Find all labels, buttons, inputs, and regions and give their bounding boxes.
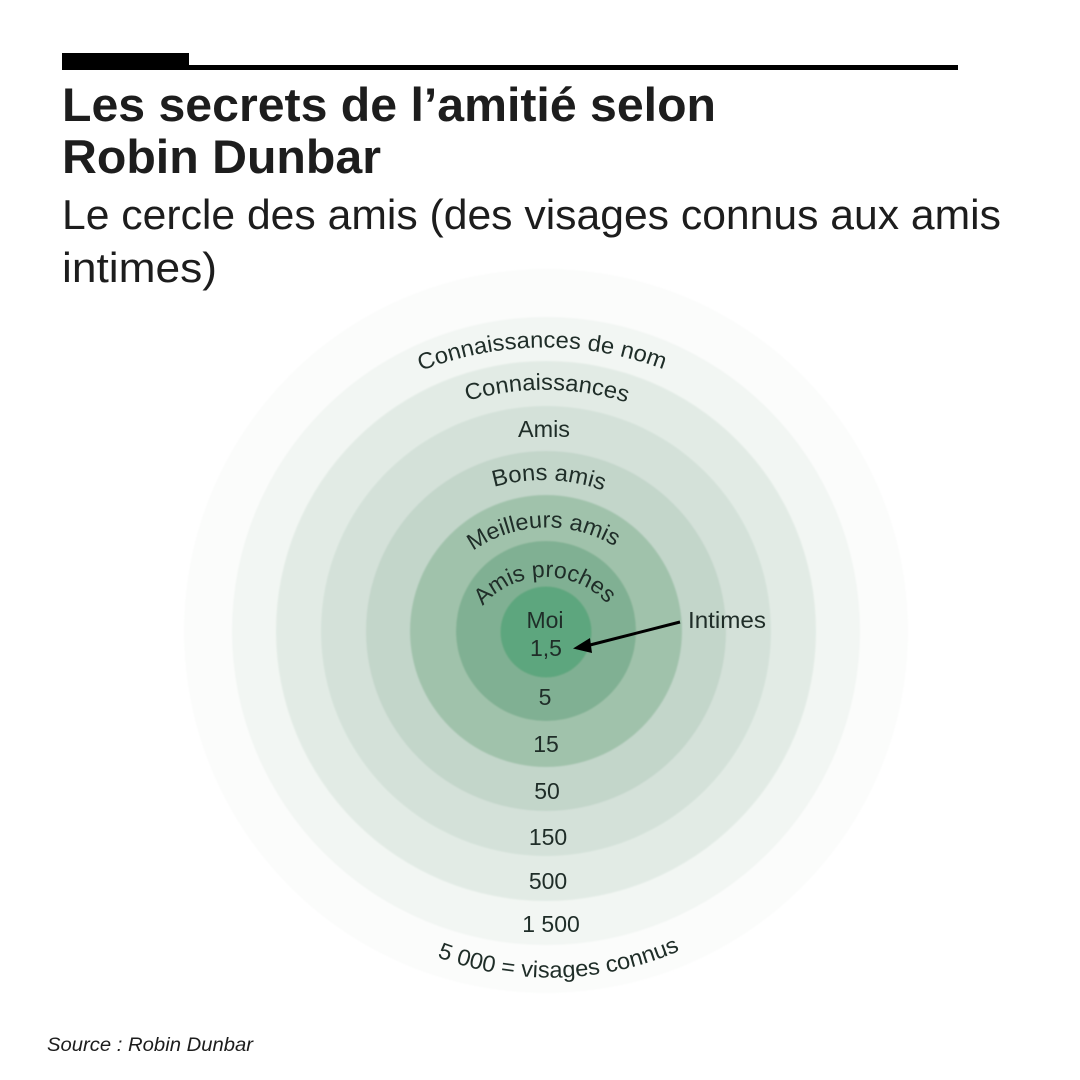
label: moi: Moi [526,607,564,633]
value: 1 500: 1 500 [522,911,580,937]
value: 1,5: 1,5 [530,635,562,661]
arrow: intimes [573,622,680,653]
source: Source : Robin Dunbar [47,1035,254,1056]
chart: concentric friendship circles [232,317,860,982]
value: 150: 150 [529,824,567,850]
label: connaissances: Connaissances [466,373,628,402]
value: 15: 15 [533,731,559,757]
circle: connaissances [276,361,816,901]
title [62,78,716,183]
circle: amis [321,406,771,856]
value: 50: 50 [534,778,560,804]
circle: connaissances de nom [232,317,860,945]
label: bons amis: Bons amis [492,468,606,490]
subtitle: Le cercle des amis (des visages connus aux amis [62,191,1001,238]
label: connaissances de nom: Connaissances de nom [418,335,666,369]
title: Les secrets de l’amitié selon [62,78,716,131]
label: 5 000 visages connus: 5 000 = visages connus [438,940,678,982]
header rule [62,53,958,70]
label: meilleurs amis: Meilleurs amis [466,515,619,550]
title: Robin Dunbar [62,130,381,183]
circle stack [184,269,908,993]
circle: meilleurs amis [410,495,682,767]
circle: visages connus [184,269,908,993]
value: 500: 500 [529,868,567,894]
label: amis proches: Amis proches [476,564,614,606]
circle: amis proches [456,541,636,721]
subtitle [62,191,1001,291]
circle: moi [500,586,592,678]
label: amis: Amis [518,416,570,442]
value: 5: 5 [539,684,551,710]
label: intimes: Intimes [688,607,766,633]
circle: bons amis [366,451,726,811]
subtitle: intimes) [62,244,217,291]
